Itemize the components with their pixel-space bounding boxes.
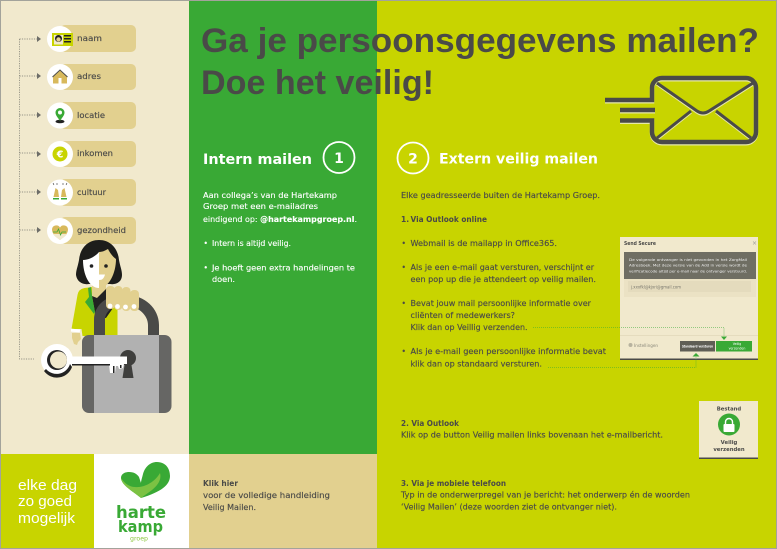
text: intern body: • xyxy=(204,239,208,248)
item: cultuur: cultuur xyxy=(77,188,107,197)
title: Doe het veilig! xyxy=(201,64,434,102)
text: extern body: • xyxy=(402,263,406,272)
shirt xyxy=(92,288,113,318)
neck xyxy=(92,282,106,302)
dotted connector lines xyxy=(20,39,38,359)
text: intern body: Intern is altijd veilig. xyxy=(212,239,291,248)
text: extern body: een pop up die je attendeert op veilig mailen. xyxy=(410,275,596,284)
text: extern body: • xyxy=(402,347,406,356)
face xyxy=(83,252,99,288)
item: adres xyxy=(47,64,136,90)
item: gezondheid: gezondheid xyxy=(77,226,126,235)
logo: hartekamp groep: harte xyxy=(116,503,166,523)
text: extern body: Als je een e-mail gaat versturen, verschijnt er xyxy=(410,263,595,272)
text: intern body: Groep met een e-mailadres xyxy=(203,202,318,211)
jacket xyxy=(72,287,118,336)
dialog: send secure: × xyxy=(752,240,757,247)
cuff and hand xyxy=(71,329,80,332)
heading: intern mailen: Intern mailen xyxy=(203,152,312,168)
text: intern body: Je hoeft geen extra handelingen te xyxy=(211,264,355,272)
dialog: send secure: Instellingen xyxy=(634,343,658,349)
text: extern body: Webmail is de mailapp in Office365. xyxy=(410,239,557,248)
item: inkomen: € xyxy=(56,150,63,160)
text: intern body: eindigend op: @hartekampgroep.nl . xyxy=(203,215,357,224)
dialog: send secure: Adresboek. Met deze versie van de Add in versie wordt de xyxy=(629,262,748,268)
body of lock xyxy=(82,335,172,413)
text: intern body xyxy=(203,191,357,284)
title: Ga je persoonsgegevens mailen? xyxy=(201,22,759,60)
heading: extern veilig mailen: Extern veilig mailen xyxy=(439,152,598,168)
shackle xyxy=(94,295,159,345)
text: extern body: 2. Via Outlook xyxy=(401,419,460,428)
connector arrowheads xyxy=(37,36,41,233)
item: naam xyxy=(47,25,136,52)
item: adres: adres xyxy=(77,72,101,81)
text: extern body xyxy=(400,191,690,512)
dialog: send secure: Veilig xyxy=(733,342,741,346)
heading: extern veilig mailen: 2 xyxy=(408,152,418,168)
text: intern body: Aan collega’s van de Hartekamp xyxy=(203,191,337,200)
item: cultuur xyxy=(47,179,136,206)
text: extern body: • xyxy=(402,239,406,248)
text: extern body: ‘Veilig Mailen’ (deze woorden ziet de ontvanger niet). xyxy=(401,502,617,512)
logo: hartekamp groep: kamp xyxy=(118,517,163,536)
slogan: mogelijk xyxy=(18,510,76,527)
dialog: send secure: j.xxxfkl@kjxri@gmail.com xyxy=(630,284,681,290)
card: veilig verzenden button xyxy=(699,401,758,459)
item: inkomen: inkomen xyxy=(77,149,113,158)
text: extern body: Klik op de button Veilig mailen links bovenaan het e-mailbericht. xyxy=(401,430,663,440)
text: extern body: cliënten of medewerkers? xyxy=(410,311,515,320)
illustration: woman with padlock and key xyxy=(41,240,172,413)
card: veilig verzenden button: Veilig xyxy=(721,440,738,446)
icon: envelope with speed lines xyxy=(605,78,756,143)
logo: hartekamp groep xyxy=(116,462,170,542)
slogan: elke dag xyxy=(18,477,77,494)
item: gezondheid xyxy=(47,217,136,244)
item: locatie xyxy=(47,102,136,129)
text: extern body: 3. Via je mobiele telefoon xyxy=(401,479,506,488)
heading: intern mailen: 1 xyxy=(334,151,344,167)
text: extern body: 1. xyxy=(401,215,409,224)
callout lines to dialog buttons xyxy=(533,328,727,368)
title xyxy=(201,22,759,102)
heading: intern mailen xyxy=(203,142,354,173)
text: extern body: Als je e-mail geen persoonlijke informatie bevat xyxy=(410,347,606,356)
text: intern body: • xyxy=(204,264,208,272)
text: extern body: Klik dan op Veillig verzenden. xyxy=(410,323,528,332)
link text: klik hier: voor de volledige handleiding xyxy=(203,491,330,500)
item: locatie: locatie xyxy=(77,111,105,120)
logo: hartekamp groep: groep xyxy=(130,536,148,542)
text: intern body: doen. xyxy=(212,275,235,284)
link text: klik hier: Veilig Mailen. xyxy=(203,503,256,512)
card: veilig verzenden button: verzenden xyxy=(713,447,745,453)
slogan xyxy=(18,477,77,527)
item: naam: naam xyxy=(77,34,102,43)
slogan: zo goed xyxy=(18,493,72,510)
card: veilig verzenden button: Bestand xyxy=(717,406,741,412)
text: extern body: • xyxy=(402,299,406,308)
dialog: send secure: Standaard versturen xyxy=(682,344,713,348)
dialog: send secure: Send Secure xyxy=(624,241,657,247)
dialog: send secure: verificatiecode altijd per e-mail naar de ontvanger verstuurd. xyxy=(629,268,747,274)
lapel xyxy=(85,287,95,314)
text: extern body: Bevat jouw mail persoonlijke informatie over xyxy=(410,299,592,308)
key xyxy=(41,344,73,376)
link text: klik hier: Klik hier xyxy=(203,479,238,488)
text: extern body: Elke geadresseerde buiten de Hartekamp Groep. xyxy=(401,191,600,200)
dialog: send secure: De volgende ontvanger is niet gevonden in het ZorgMail xyxy=(629,257,747,262)
hand xyxy=(106,286,139,311)
heading: extern veilig mailen xyxy=(398,142,598,174)
hair xyxy=(76,240,122,284)
text: extern body: Typ in de onderwerpregel van je bericht: het onderwerp én de woorden xyxy=(400,490,690,500)
text: extern body: klik dan op standaard versturen. xyxy=(410,360,542,368)
link text: klik hier xyxy=(203,479,330,512)
dialog: send secure xyxy=(620,237,758,360)
dialog: send secure: verzenden xyxy=(729,346,745,350)
text: extern body: Via Outlook online xyxy=(410,215,487,224)
item: inkomen xyxy=(47,141,136,167)
